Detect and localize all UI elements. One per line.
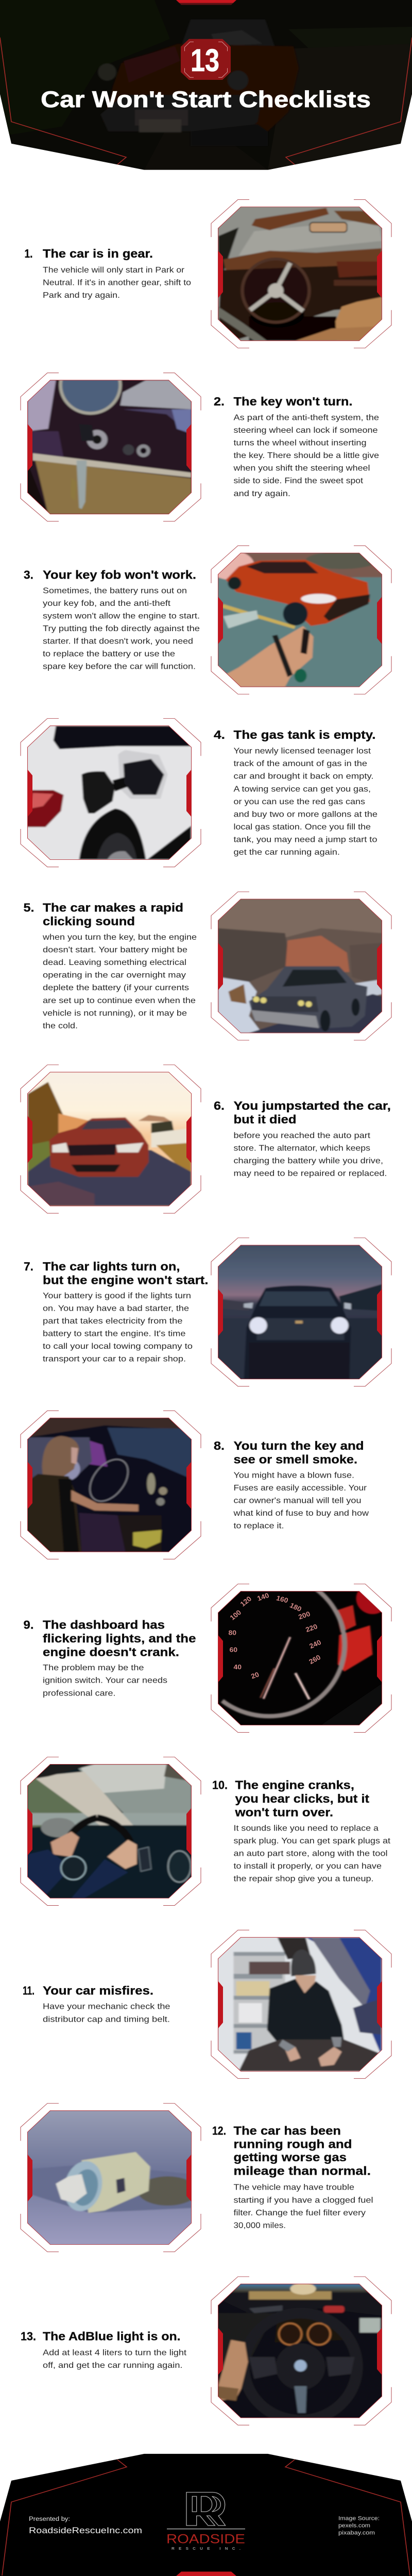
header banner (0, 0, 412, 175)
body text (233, 414, 379, 498)
body text: store. The alternator, which keeps (234, 1144, 370, 1153)
heading: The car lights turn on, (43, 1260, 180, 1274)
body text: tank, you may need a jump start to (234, 836, 377, 844)
photo: view of BMW steering wheel at night (211, 2277, 391, 2425)
heading: You turn the key and (234, 1439, 364, 1453)
body text: an auto part store, along with the tool (234, 1850, 387, 1858)
number: 6. (214, 1099, 225, 1113)
number badge: 13 (191, 43, 219, 78)
body text: may need to be repaired or replaced. (234, 1170, 387, 1178)
presented by (29, 2516, 142, 2535)
heading: Your car misfires. (43, 1984, 153, 1997)
body text: system won't allow the engine to start. (43, 612, 200, 620)
heading (234, 1778, 369, 1819)
number: 3. (24, 568, 33, 582)
heading: getting worse gas (234, 2151, 347, 2164)
top red tab (176, 0, 236, 5)
body text: Try putting the fob directly against the (43, 624, 200, 633)
item 7 (24, 1238, 391, 1386)
image sources (338, 2515, 380, 2536)
body text: turns the wheel without inserting (234, 439, 367, 447)
photo frame (211, 1238, 391, 1386)
number: 1. (25, 247, 32, 261)
footer black panel (0, 2454, 412, 2576)
body text: professional care. (43, 1689, 115, 1698)
heading (43, 1260, 208, 1287)
body text: track of the amount of gas in the (234, 760, 367, 768)
body text: the key. There should be a little give (234, 451, 379, 460)
body text: part that takes electricity from the (43, 1317, 183, 1326)
item 1 (25, 199, 391, 348)
company logo (166, 2492, 245, 2551)
body text: battery to start the engine. It's time (43, 1330, 186, 1338)
body text: filter. Change the fuel filter every (234, 2209, 366, 2217)
body text: A towing service can get you gas, (234, 785, 371, 793)
heading: The engine cranks, (235, 1778, 354, 1792)
number: 11. (23, 1984, 35, 1997)
body text: dead. Leaving something electrical (43, 958, 186, 967)
photo frame (21, 1411, 201, 1559)
speedometer dial numbers: 120 (239, 1595, 253, 1608)
body text: to install it properly, or you can have (234, 1862, 382, 1871)
number badge (181, 39, 231, 80)
body text: before you reached the auto part (234, 1131, 371, 1140)
footer (0, 2454, 412, 2576)
heading (43, 1618, 196, 1659)
heading (234, 1439, 364, 1466)
body text: Park and try again. (43, 292, 120, 300)
body text: to replace the battery or use the (43, 650, 175, 658)
body text: spark plug. You can get spark plugs at (234, 1837, 391, 1845)
body text: on. You may have a bad starter, the (43, 1304, 189, 1313)
speedometer dial numbers: 180 (288, 1601, 303, 1613)
body text: Fuses are easily accessible. Your (234, 1484, 367, 1493)
bottom red tab (176, 2571, 236, 2576)
body text: the repair shop give you a tuneup. (234, 1875, 374, 1884)
body text (234, 747, 377, 857)
number: 2. (214, 395, 225, 409)
photo: hands on a steering wheel (21, 1757, 201, 1906)
body text: As part of the anti-theft system, the (234, 414, 379, 422)
photo: fuel filter on a blue-grey surface (21, 2104, 201, 2252)
speedometer dial numbers: 40 (234, 1663, 242, 1671)
body text: Add at least 4 liters to turn the light (43, 2349, 187, 2357)
heading: The dashboard has (43, 1618, 165, 1632)
speedometer dial numbers: 160 (276, 1594, 289, 1604)
body text: spare key before the car will function. (43, 663, 196, 671)
photo frame (21, 373, 201, 521)
body text: ignition switch. Your car needs (43, 1676, 167, 1685)
heading: but it died (234, 1113, 297, 1126)
photo: speedometer with red lights (211, 1583, 391, 1733)
body text (42, 933, 197, 1030)
photo: mechanic working under a car hood (211, 1930, 391, 2078)
body text (43, 1292, 193, 1364)
photo: car interior with steering wheel (211, 199, 391, 348)
photo frame (21, 1065, 201, 1213)
logo mark: RR monogram (186, 2492, 226, 2526)
body text (234, 1131, 387, 1178)
speedometer dial numbers: 140 (256, 1591, 270, 1602)
speedometer dial numbers: 260 (307, 1653, 322, 1666)
logo wordmark: ROADSIDE (166, 2532, 245, 2547)
body text: starting if you have a clogged fuel (234, 2196, 373, 2205)
speedometer dial numbers: 20 (250, 1671, 261, 1680)
heading: running rough and (234, 2138, 352, 2151)
heading: clicking sound (43, 915, 135, 928)
body text: and try again. (234, 489, 290, 498)
photo: keys in the ignition (21, 357, 201, 521)
number: 5. (24, 901, 34, 914)
body text (43, 2349, 187, 2370)
heading: won't turn over. (234, 1806, 333, 1819)
heading: The car is in gear. (43, 247, 153, 261)
photo frame (211, 199, 391, 348)
body text: 30,000 miles. (234, 2222, 286, 2230)
photo frame (211, 892, 391, 1040)
body text: car and brought it back on empty. (234, 772, 374, 781)
heading: flickering lights, and the (43, 1632, 196, 1646)
speedometer dial numbers: 240 (308, 1638, 322, 1650)
item 2 (21, 357, 379, 521)
body text: Your newly licensed teenager lost (234, 747, 371, 755)
red outline: left (0, 38, 126, 164)
title: Car Won't Start Checklists (41, 87, 371, 112)
body text: what kind of fuse to buy and how (233, 1510, 369, 1518)
heading (234, 2124, 371, 2178)
body text (43, 2003, 170, 2024)
heading: mileage than normal. (234, 2164, 371, 2178)
body text: are set up to continue even when the (43, 996, 196, 1005)
image sources: Image Source: (338, 2515, 380, 2521)
body text: doesn't start. Your battery might be (43, 946, 187, 954)
image sources: pexels.com (338, 2522, 370, 2529)
image sources: pixabay.com (338, 2530, 375, 2536)
body text: local gas station. Once you fill the (234, 823, 371, 832)
header background photo: dark red classic car (0, 0, 412, 175)
heading: but the engine won't start. (43, 1274, 208, 1287)
speedometer dial numbers: 80 (229, 1629, 237, 1637)
body text: Have your mechanic check the (43, 2003, 170, 2011)
presented by: RoadsideRescueInc.com (29, 2525, 142, 2535)
speedometer dial numbers: 100 (229, 1608, 243, 1622)
body text (233, 1471, 369, 1531)
number: 7. (24, 1260, 33, 1274)
heading: You jumpstarted the car, (234, 1099, 391, 1113)
body text: It sounds like you need to replace a (234, 1824, 379, 1833)
item 9 (24, 1583, 391, 1733)
photo: hand pointing key fob at red car (208, 546, 391, 694)
number: 4. (214, 728, 225, 742)
photo frame (21, 1757, 201, 1906)
body text (234, 2183, 373, 2230)
body text: vehicle is not running), or it may be (43, 1009, 187, 1018)
body text (43, 1664, 167, 1698)
body text: to replace it. (234, 1522, 284, 1531)
heading: engine doesn't crank. (43, 1646, 179, 1659)
photo frame (21, 719, 201, 867)
number: 9. (24, 1618, 33, 1632)
heading: The key won't turn. (234, 395, 352, 409)
body text (43, 587, 200, 671)
speedometer dial numbers: 60 (229, 1646, 238, 1654)
item 4 (21, 719, 377, 867)
logo tagline: RESCUE INC. (171, 2546, 241, 2551)
photo frame (211, 2277, 391, 2425)
body text: steering wheel can lock if someone (234, 426, 378, 435)
speedometer dial numbers: 220 (304, 1622, 319, 1634)
body text: side to side. Find the sweet spot (234, 477, 364, 485)
body text: distributor cap and timing belt. (43, 2015, 170, 2024)
heading: Your key fob won't work. (43, 568, 196, 582)
red outline: right (286, 38, 412, 164)
presented by: Presented by: (29, 2516, 70, 2522)
number: 8. (214, 1439, 225, 1453)
heading (43, 901, 183, 928)
body text (43, 266, 191, 300)
item 10 (21, 1757, 391, 1906)
body text: You might have a blown fuse. (234, 1471, 354, 1480)
photo frame (21, 2104, 201, 2252)
photo frame (211, 1930, 391, 2078)
body text: The problem may be the (43, 1664, 144, 1672)
photo frame (211, 1584, 391, 1733)
heading: The car has been (234, 2124, 341, 2138)
photo: white car with open fuel door (21, 719, 201, 867)
heading: see or smell smoke. (234, 1453, 357, 1466)
number: 10. (212, 1778, 228, 1792)
body text: operating in the car overnight may (43, 971, 186, 980)
number: 12. (212, 2124, 226, 2138)
item 11 (23, 1930, 391, 2078)
body text: the cold. (43, 1022, 78, 1030)
body text: The vehicle may have trouble (234, 2183, 354, 2192)
body text: and buy two or more gallons at the (234, 810, 377, 819)
heading: The gas tank is empty. (234, 728, 376, 742)
item 5 (24, 892, 391, 1040)
number: 13. (21, 2330, 36, 2344)
body text: Neutral. If it's in another gear, shift to (43, 279, 191, 287)
photo: red BMW at sunset on gravel road (21, 1065, 201, 1213)
red outline: right (285, 2460, 410, 2575)
body text: when you shift the steering wheel (233, 464, 370, 473)
item 3 (24, 546, 391, 694)
body text: when you turn the key, but the engine (42, 933, 197, 942)
heading: The AdBlue light is on. (43, 2330, 180, 2344)
speedometer dial numbers: 200 (297, 1610, 312, 1621)
body text: starter. If that doesn't work, you need (43, 637, 193, 646)
item 12 (21, 2104, 373, 2252)
body text: deplete the battery (if your currents (43, 984, 189, 992)
item 13 (21, 2277, 391, 2425)
body text: Sometimes, the battery runs out on (43, 587, 187, 595)
body text: off, and get the car running again. (43, 2361, 182, 2370)
photo: dark SUV with headlights on at dusk (211, 1238, 391, 1386)
heading (234, 1099, 391, 1126)
body text: your key fob, and the anti-theft (43, 599, 171, 608)
photo frame (211, 546, 391, 694)
speedometer dial numbers (229, 1591, 322, 1680)
body text: get the car running again. (234, 848, 340, 857)
item 6 (21, 1065, 391, 1213)
body text: to call your local towing company to (43, 1342, 193, 1351)
body text: car owner's manual will tell you (234, 1497, 362, 1505)
red outline: left (2, 2460, 127, 2575)
body text: Your battery is good if the lights turn (43, 1292, 191, 1300)
photo: grey BMW on a snowy road (211, 892, 391, 1040)
item 8 (21, 1411, 369, 1559)
photo: woman in a smoky vintage car (21, 1411, 201, 1559)
heading: you hear clicks, but it (235, 1792, 369, 1806)
body text: The vehicle will only start in Park or (43, 266, 184, 275)
body text: charging the battery while you drive, (234, 1157, 383, 1165)
body text: transport your car to a repair shop. (43, 1355, 186, 1364)
body text: or you can use the red gas cans (234, 798, 365, 806)
body text (234, 1824, 391, 1884)
heading: The car makes a rapid (43, 901, 183, 914)
